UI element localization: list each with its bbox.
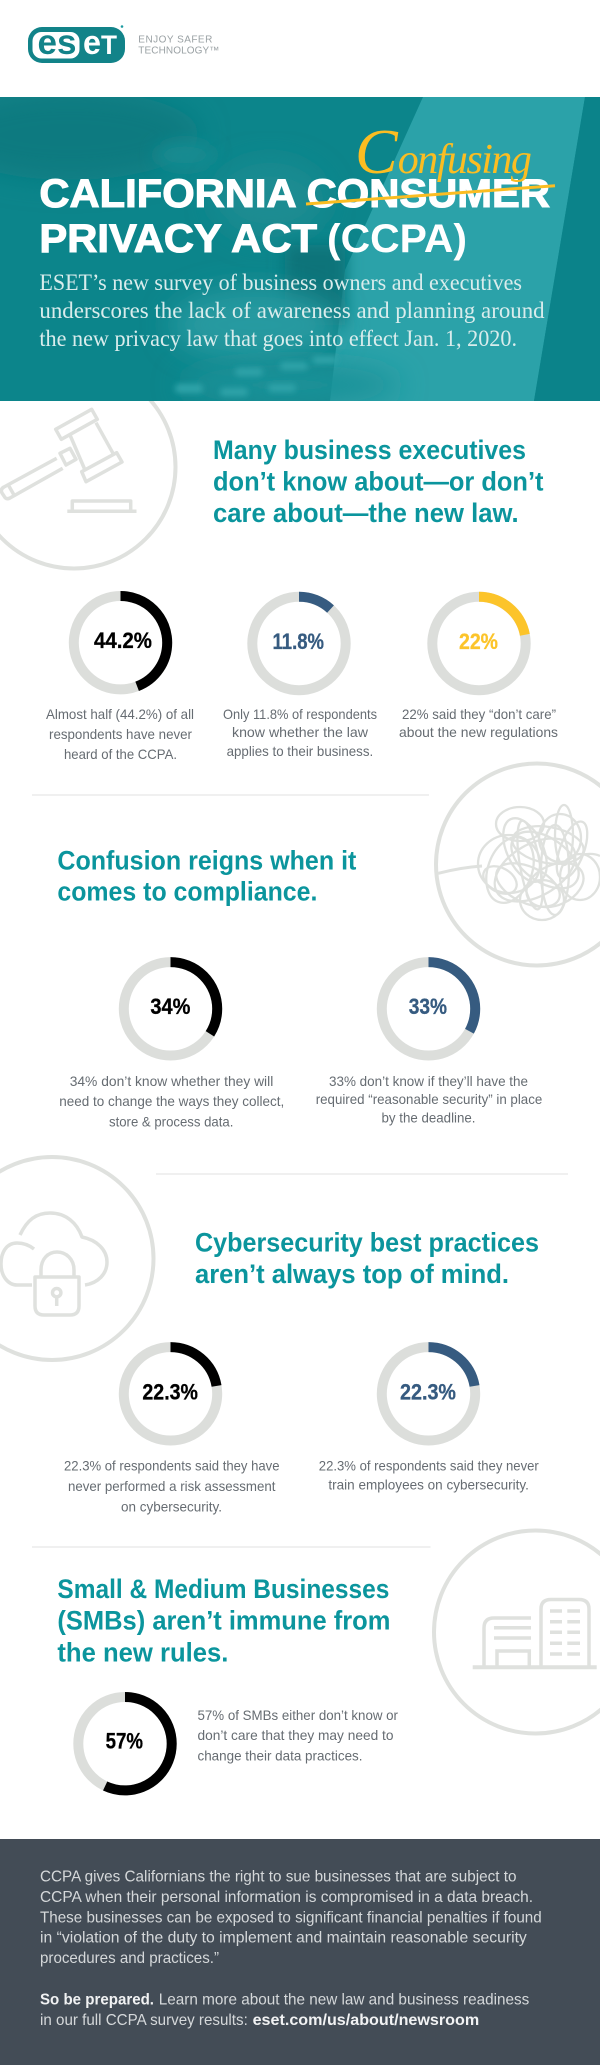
icon: buildings in circle bbox=[434, 1530, 600, 1734]
section 1: awareness bbox=[1, 409, 558, 762]
donut: 44.2% bbox=[74, 596, 167, 689]
caption: 34%: store & process data. bbox=[109, 1114, 233, 1130]
footer paragraph: procedures and practices.” bbox=[40, 1950, 219, 1967]
caption: 33%: by the deadline. bbox=[382, 1110, 476, 1126]
caption: 22%: about the new regulations bbox=[399, 724, 558, 740]
donut: 57%: 57% bbox=[106, 1728, 143, 1753]
caption: risk assessment: on cybersecurity. bbox=[121, 1499, 222, 1515]
caption: 34% bbox=[59, 1073, 284, 1130]
caption: 57% bbox=[198, 1707, 398, 1764]
caption: 33%: 33% don’t know if they’ll have the bbox=[329, 1073, 528, 1089]
hero intro text bbox=[39, 270, 545, 351]
caption: 44.2%: heard of the CCPA. bbox=[64, 746, 177, 762]
footer call to action: So be prepared. bbox=[40, 1991, 154, 2008]
caption: 11.8%: Only 11.8% of respondents bbox=[223, 706, 377, 722]
section 3 heading bbox=[195, 1228, 539, 1289]
section 3: best practices bbox=[0, 1157, 539, 1515]
caption: 11.8%: applies to their business. bbox=[227, 743, 373, 759]
icon: tangle in circle bbox=[436, 764, 600, 966]
donut: 34% bbox=[124, 962, 217, 1056]
donut: 11.8% bbox=[252, 597, 346, 690]
strikethrough line bbox=[306, 186, 555, 204]
tagline: TECHNOLOGY™ bbox=[138, 45, 219, 56]
hero banner bbox=[0, 90, 600, 405]
section 1 heading: Many business executives bbox=[213, 435, 526, 465]
footer call to action: eset.com/us/about/newsroom bbox=[253, 2012, 479, 2029]
donut: 34%: 34% bbox=[150, 994, 190, 1019]
section 2 heading bbox=[57, 845, 356, 907]
caption: 11.8% bbox=[223, 706, 377, 759]
hero intro text: ESET’s new survey of business owners and executives bbox=[39, 270, 522, 295]
footer paragraph: CCPA gives Californians the right to sue businesses that are subject to bbox=[40, 1868, 517, 1886]
donut: 33% bbox=[382, 962, 475, 1056]
caption: employee training: 22.3% of respondents said they never bbox=[319, 1458, 539, 1474]
caption: 44.2%: Almost half (44.2%) of all bbox=[46, 706, 194, 722]
caption: 22% bbox=[399, 706, 558, 740]
footer call to action: Learn more about the new law and business readiness bbox=[159, 1991, 529, 2008]
section 2 heading: comes to compliance. bbox=[57, 877, 317, 907]
ESET logo bbox=[28, 23, 125, 63]
section 4 heading: (SMBs) aren’t immune from bbox=[57, 1606, 390, 1636]
caption: 11.8%: know whether the law bbox=[232, 724, 369, 740]
caption: employee training bbox=[319, 1458, 539, 1492]
caption: risk assessment: never performed a risk assessment bbox=[68, 1478, 276, 1494]
footer panel bbox=[0, 1839, 600, 2065]
section 2 heading: Confusion reigns when it bbox=[57, 845, 356, 875]
donut: 44.2%: 44.2% bbox=[94, 628, 152, 653]
caption: 34%: 34% don’t know whether they will bbox=[70, 1073, 273, 1089]
footer paragraph: These businesses can be exposed to significant financial penalties if found bbox=[40, 1910, 542, 1926]
ESET logo: T bbox=[101, 30, 117, 60]
donut: 57% bbox=[78, 1697, 172, 1790]
section 1 heading: care about—the new law. bbox=[213, 498, 519, 528]
hero intro text: underscores the lack of awareness and planning around bbox=[39, 298, 545, 323]
section 1 heading: don’t know about—or don’t bbox=[213, 467, 544, 497]
hero title: CALIFORNIA CONSUMER bbox=[39, 172, 550, 216]
hero title bbox=[39, 172, 550, 261]
handwritten word: Confusing: Confusing bbox=[355, 116, 531, 187]
caption: employee training: train employees on cybersecurity. bbox=[328, 1476, 529, 1492]
icon: cloud with padlock in circle bbox=[0, 1157, 154, 1360]
header: logo and tagline bbox=[28, 23, 219, 63]
tagline bbox=[138, 35, 219, 56]
ESET logo: es bbox=[38, 23, 76, 62]
caption: 34%: need to change the ways they collect, bbox=[59, 1093, 284, 1109]
caption: 33% bbox=[316, 1073, 543, 1126]
ESET logo: e bbox=[83, 24, 101, 62]
caption: risk assessment bbox=[64, 1458, 280, 1515]
donut: 22.3% black: 22.3% bbox=[142, 1379, 198, 1404]
hero photo background bbox=[0, 90, 600, 405]
section 4 heading: the new rules. bbox=[57, 1637, 228, 1667]
footer paragraph bbox=[40, 1868, 542, 1967]
caption: 57%: don’t care that they may need to bbox=[198, 1727, 394, 1743]
footer call to action bbox=[40, 1991, 529, 2029]
footer paragraph: in “violation of the duty to implement and maintain reasonable security bbox=[40, 1929, 527, 1946]
section 4 heading: Small & Medium Businesses bbox=[57, 1574, 389, 1604]
section 1 background circle bbox=[0, 366, 176, 568]
icon: gavel bbox=[1, 409, 137, 511]
donut: 22.3% blue: 22.3% bbox=[400, 1379, 456, 1404]
caption: 33%: required “reasonable security” in place bbox=[316, 1091, 543, 1107]
donut: 22% bbox=[432, 597, 526, 690]
section 4: small and medium businesses bbox=[57, 1530, 600, 1790]
section 2: compliance bbox=[57, 764, 600, 1130]
section 3 heading: aren’t always top of mind. bbox=[195, 1259, 509, 1289]
caption: 22%: 22% said they “don’t care” bbox=[402, 706, 556, 722]
caption: 44.2%: respondents have never bbox=[49, 726, 192, 742]
donut: 33%: 33% bbox=[409, 994, 447, 1019]
tagline: ENJOY SAFER bbox=[138, 35, 212, 46]
donut: 11.8%: 11.8% bbox=[272, 629, 324, 654]
footer call to action: in our full CCPA survey results: bbox=[40, 2012, 248, 2029]
section 3 heading: Cybersecurity best practices bbox=[195, 1228, 539, 1258]
caption: 44.2% bbox=[46, 706, 194, 762]
donut: 22.3% black bbox=[124, 1347, 217, 1441]
donut: 22.3% blue bbox=[382, 1347, 475, 1441]
section 4 heading bbox=[58, 1578, 389, 1662]
hero title: PRIVACY ACT bbox=[39, 217, 317, 261]
hero intro text: the new privacy law that goes into effect Jan. 1, 2020. bbox=[39, 326, 517, 351]
section 1 heading bbox=[213, 435, 544, 528]
footer paragraph: CCPA when their personal information is compromised in a data breach. bbox=[40, 1889, 533, 1906]
hero title: (CCPA) bbox=[327, 217, 467, 261]
caption: risk assessment: 22.3% of respondents said they have bbox=[64, 1458, 280, 1474]
caption: 57%: change their data practices. bbox=[198, 1748, 362, 1764]
caption: 57%: 57% of SMBs either don’t know or bbox=[198, 1707, 398, 1723]
donut: 22%: 22% bbox=[459, 629, 498, 654]
